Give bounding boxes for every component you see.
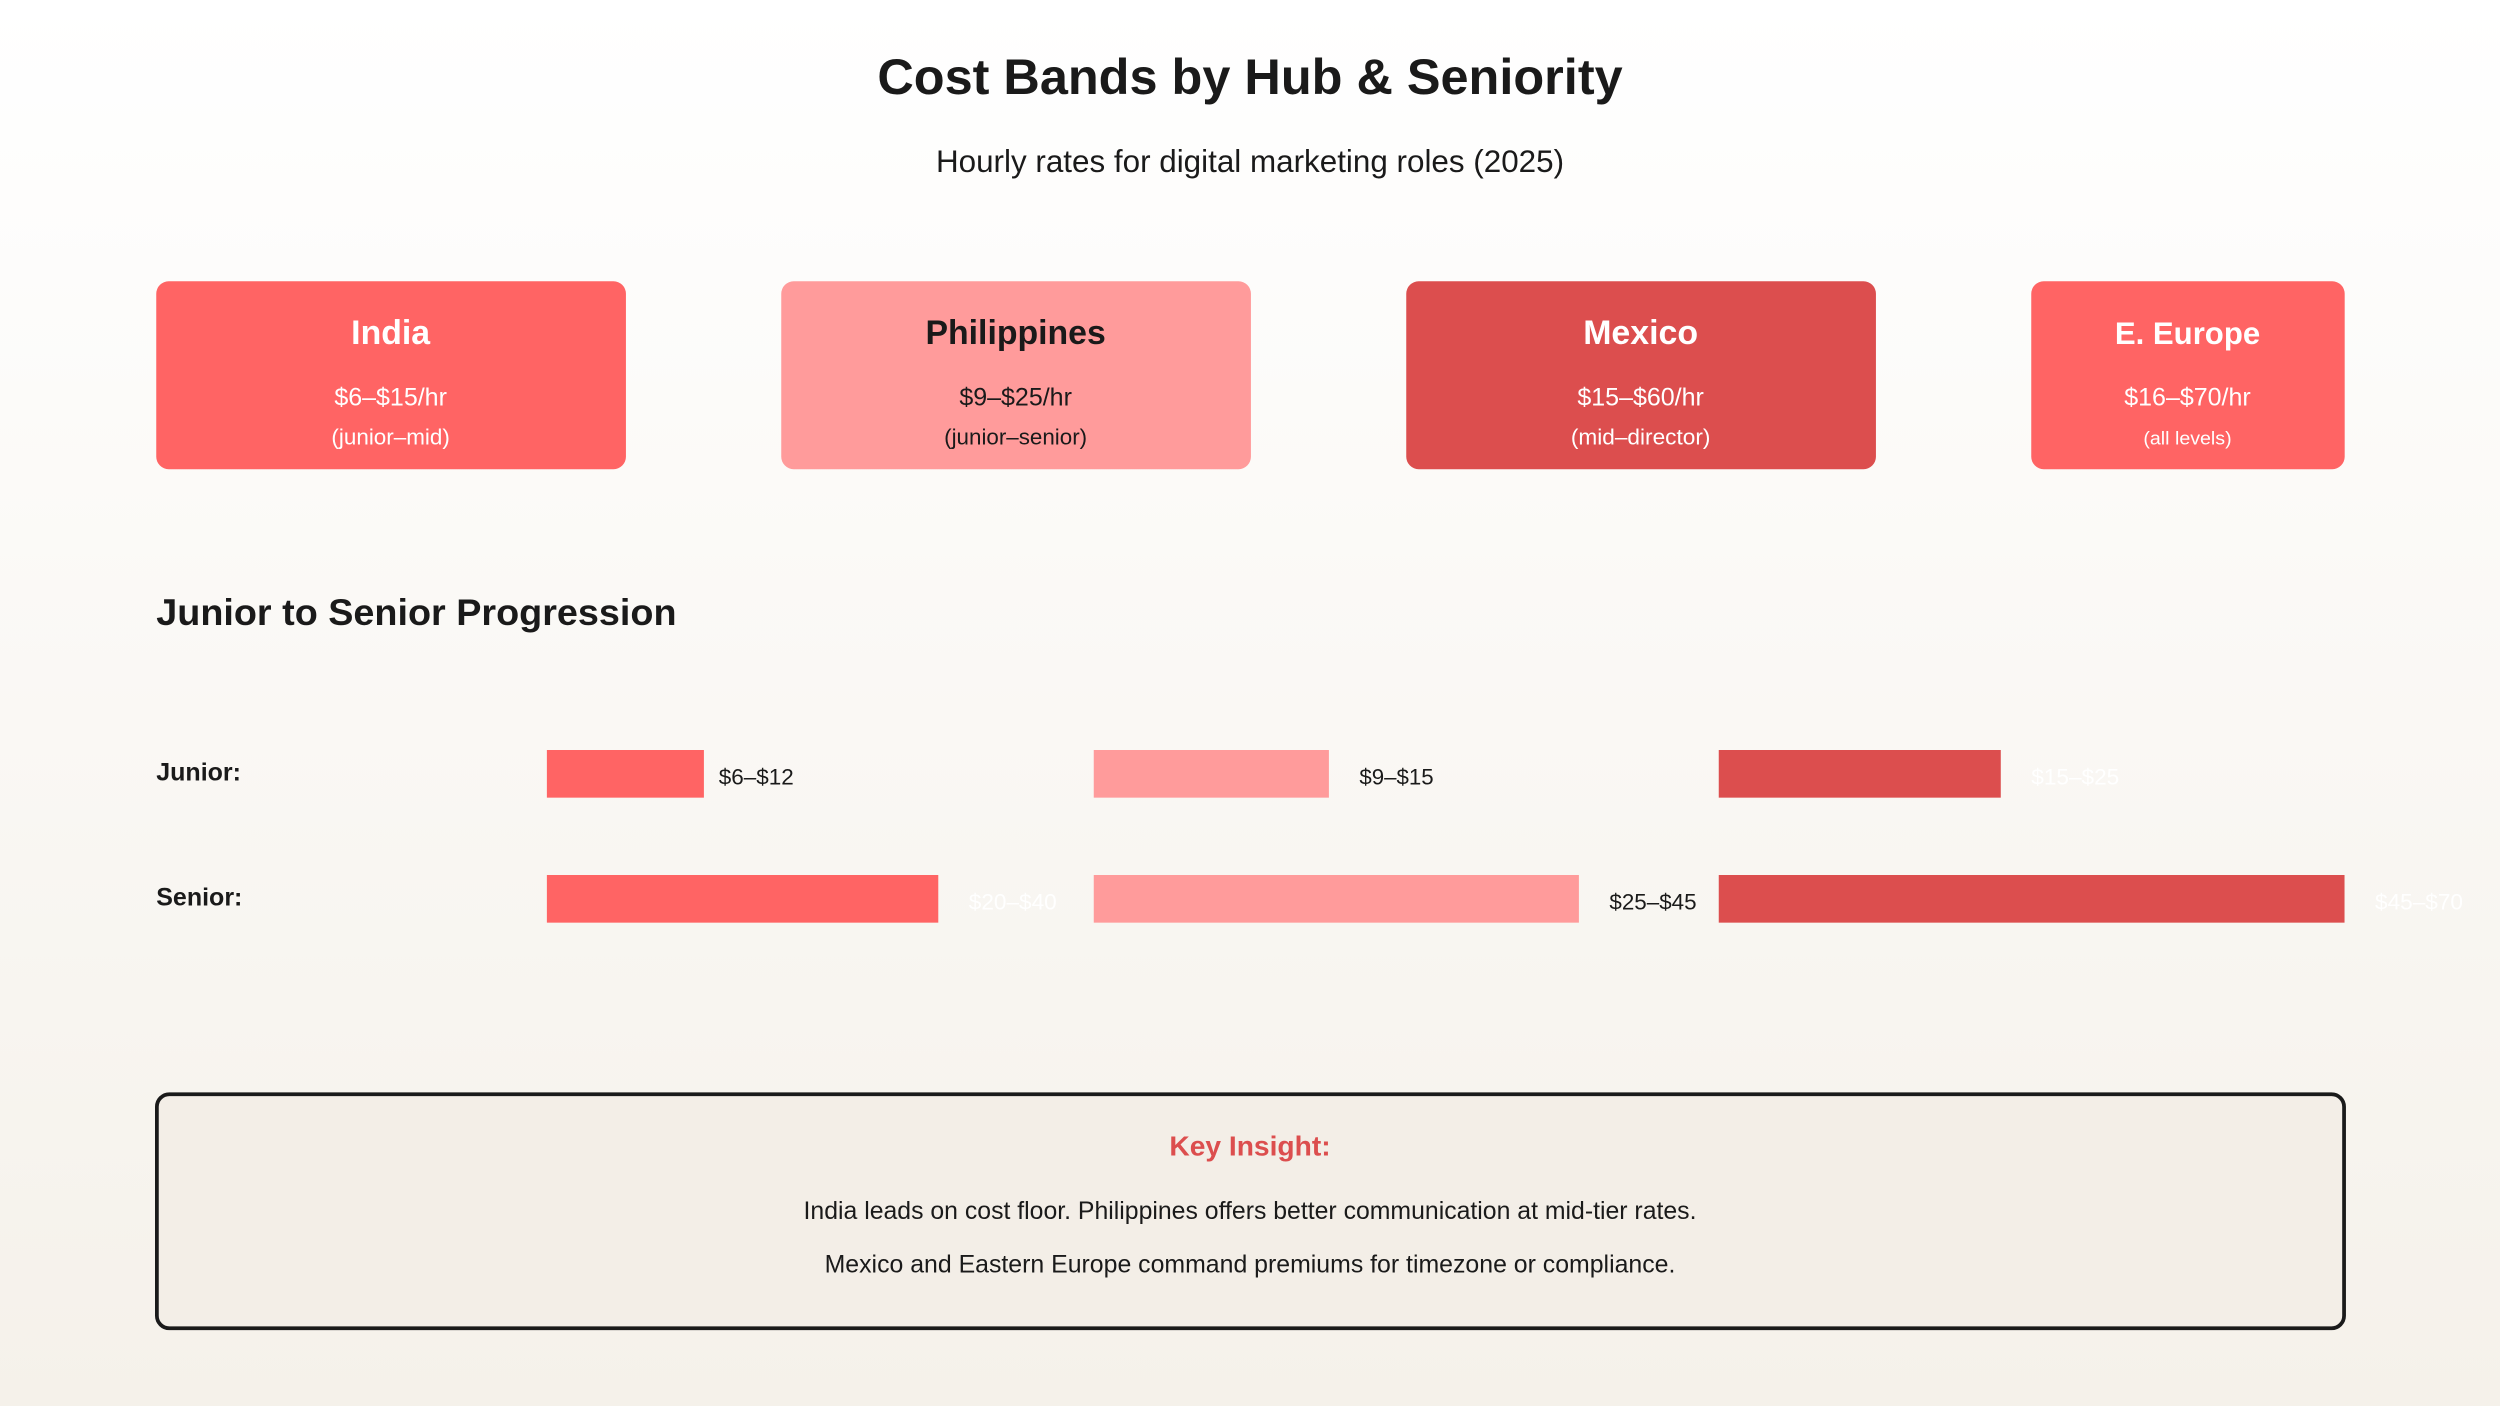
bar: India senior: $20–$40 xyxy=(969,889,1057,914)
panel: Mexico xyxy=(1406,281,1876,469)
bar: Mexico senior xyxy=(1719,875,2463,923)
panel: E. Europe xyxy=(2031,281,2345,469)
panel: Mexico: $15–$60/hr xyxy=(1577,383,1704,411)
panel: Philippines: Philippines xyxy=(925,314,1106,352)
bar: Philippines junior: $9–$15 xyxy=(1359,764,1434,789)
panel: India xyxy=(156,281,626,469)
title: Cost Bands by Hub & Seniority xyxy=(877,49,1623,105)
bar: India junior xyxy=(547,750,794,798)
panel: Philippines: (junior–senior) xyxy=(944,425,1087,450)
panel: E. Europe: E. Europe xyxy=(2115,316,2260,351)
bar: Philippines senior: $25–$45 xyxy=(1609,889,1697,914)
panel: India: $6–$15/hr xyxy=(334,383,447,411)
bar: Mexico junior xyxy=(1719,750,2119,798)
heading: progression: Junior to Senior Progression xyxy=(156,591,677,633)
subtitle: Hourly rates for digital marketing roles (2025) xyxy=(936,144,1564,179)
panel: India: India xyxy=(351,314,431,352)
panel: Philippines: $9–$25/hr xyxy=(959,383,1072,411)
callout: key insight: India leads on cost floor. Philippines offers better communication at mid-tier rates. xyxy=(804,1197,1696,1225)
bar: Philippines senior xyxy=(1094,875,1697,923)
callout: key insight: Mexico and Eastern Europe command premiums for timezone or compliance. xyxy=(825,1251,1675,1279)
bar: Mexico senior: $45–$70 xyxy=(2375,889,2463,914)
panel: Mexico: (mid–director) xyxy=(1571,425,1710,450)
panel: Philippines xyxy=(781,281,1251,469)
row label: Junior: Junior: xyxy=(156,758,241,786)
callout: key insight: Key Insight: xyxy=(1169,1130,1331,1161)
panel: E. Europe: $16–$70/hr xyxy=(2124,383,2251,411)
bar: Mexico junior: $15–$25 xyxy=(2031,764,2119,789)
row label: Senior: Senior: xyxy=(156,883,242,911)
callout: key insight xyxy=(157,1094,2344,1328)
panel: India: (junior–mid) xyxy=(331,425,450,450)
bar: Philippines junior xyxy=(1094,750,1434,798)
panel: E. Europe: (all levels) xyxy=(2143,428,2232,449)
bar: India senior xyxy=(547,875,1057,923)
panel: Mexico: Mexico xyxy=(1583,314,1698,352)
bar: India junior: $6–$12 xyxy=(719,764,794,789)
